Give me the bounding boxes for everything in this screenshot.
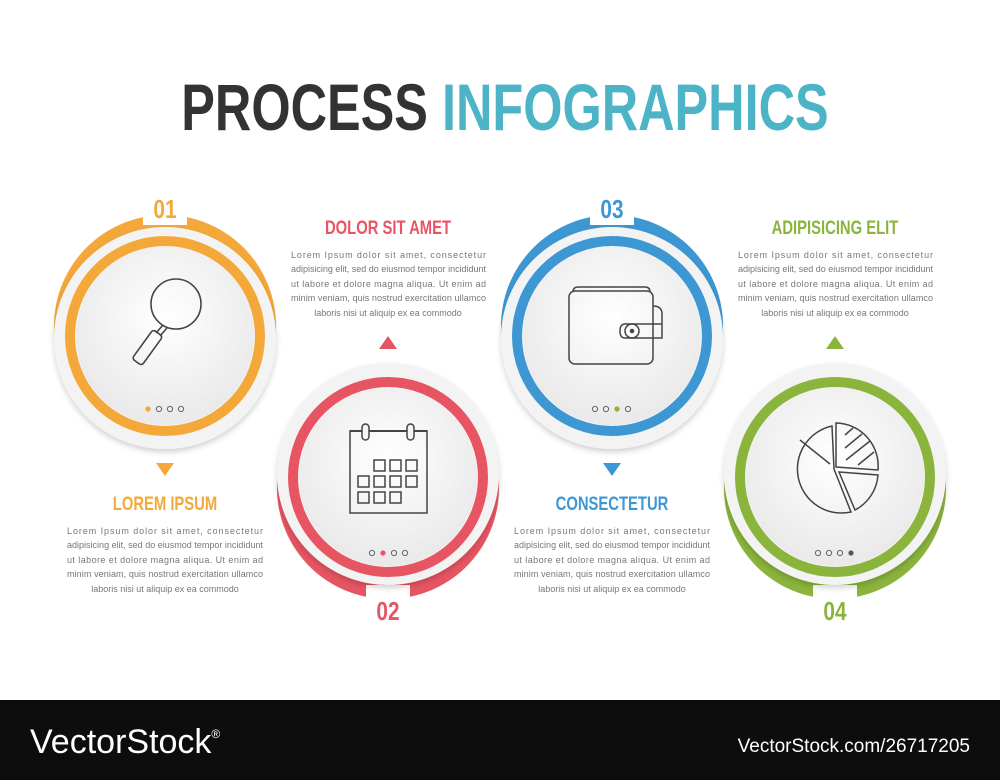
text block: consectetur <box>514 493 710 594</box>
icon: pie chart <box>797 423 878 513</box>
title: PROCESS INFOGRAPHICS <box>181 70 829 144</box>
text block: lorem ipsum: minim veniam, quis nostrud exercitation ullamco <box>67 569 263 579</box>
dots <box>145 406 184 412</box>
arrow down blue <box>603 463 621 476</box>
number 03: 03 <box>600 195 624 224</box>
text block: consectetur: adipisicing elit, sed do eiusmod tempor incididunt <box>514 540 710 550</box>
text block: consectetur: CONSECTETUR <box>556 493 668 514</box>
step 1 circle <box>54 195 276 449</box>
text block: lorem ipsum: ut labore et dolore magna aliqua. Ut enim ad <box>67 555 263 565</box>
text block: consectetur: Lorem Ipsum dolor sit amet, consectetur <box>514 526 710 536</box>
text block: consectetur: laboris nisi ut aliquip ex ea commodo <box>538 584 686 594</box>
arrow up green <box>826 336 844 349</box>
text block: dolor sit amet: ut labore et dolore magna aliqua. Ut enim ad <box>291 279 486 289</box>
text block: dolor sit amet: minim veniam, quis nostrud exercitation ullamco <box>291 293 486 303</box>
arrow up red <box>379 336 397 349</box>
text block: adipisicing elit: adipisicing elit, sed do eiusmod tempor incididunt <box>738 264 933 274</box>
text block: consectetur: ut labore et dolore magna aliqua. Ut enim ad <box>514 555 710 565</box>
dots <box>369 550 408 556</box>
footer bar <box>0 700 1000 780</box>
text block: lorem ipsum: Lorem Ipsum dolor sit amet, consectetur <box>67 526 263 536</box>
icon: magnifier <box>132 279 201 366</box>
text block: adipisicing elit: ut labore et dolore magna aliqua. Ut enim ad <box>738 279 933 289</box>
dots <box>592 406 631 412</box>
number 02: 02 <box>376 597 400 626</box>
text block: adipisicing elit <box>738 217 933 318</box>
text block: adipisicing elit: laboris nisi ut aliquip ex ea commodo <box>761 308 909 318</box>
text block: lorem ipsum: laboris nisi ut aliquip ex ea commodo <box>91 584 239 594</box>
text block: consectetur: minim veniam, quis nostrud exercitation ullamco <box>514 569 710 579</box>
number 01: 01 <box>153 195 177 224</box>
icon: calendar <box>350 424 427 513</box>
text block: dolor sit amet <box>291 217 486 318</box>
icon: wallet <box>569 287 662 364</box>
step 4 circle <box>724 363 946 615</box>
text block: lorem ipsum: adipisicing elit, sed do eiusmod tempor incididunt <box>67 540 263 550</box>
text block: lorem ipsum: LOREM IPSUM <box>113 493 217 514</box>
step 3 circle <box>501 195 723 449</box>
step 2 circle <box>277 363 499 615</box>
text block: lorem ipsum <box>67 493 263 594</box>
text block: dolor sit amet: adipisicing elit, sed do eiusmod tempor incididunt <box>291 264 486 274</box>
text block: dolor sit amet: laboris nisi ut aliquip ex ea commodo <box>314 308 462 318</box>
text block: adipisicing elit: minim veniam, quis nostrud exercitation ullamco <box>738 293 933 303</box>
footer bar: VectorStock.com/26717205 <box>738 736 970 757</box>
text block: dolor sit amet: DOLOR SIT AMET <box>325 217 452 238</box>
dots <box>815 550 854 556</box>
number 04: 04 <box>823 597 847 626</box>
text block: adipisicing elit: ADIPISICING ELIT <box>772 217 899 238</box>
footer bar: ® <box>211 727 220 741</box>
footer bar: VectorStock <box>30 723 211 761</box>
arrow down orange <box>156 463 174 476</box>
text block: dolor sit amet: Lorem Ipsum dolor sit amet, consectetur <box>291 250 486 260</box>
text block: adipisicing elit: Lorem Ipsum dolor sit amet, consectetur <box>738 250 933 260</box>
